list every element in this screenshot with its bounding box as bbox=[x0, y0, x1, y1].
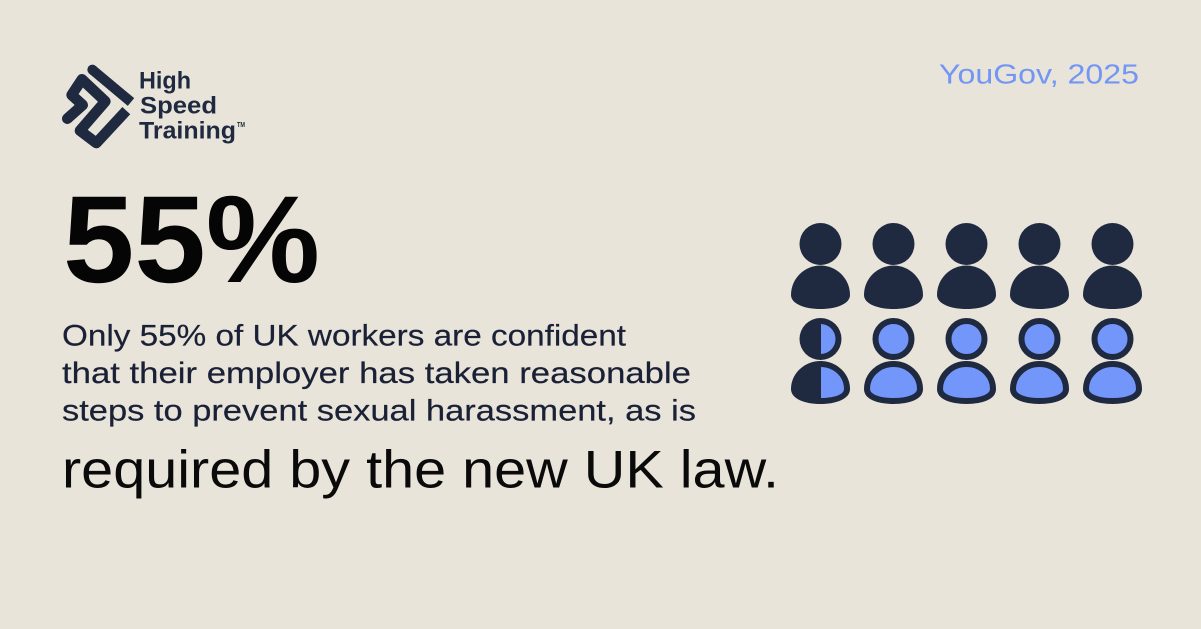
logo wordmark: TM bbox=[237, 122, 245, 129]
body text bbox=[62, 320, 696, 428]
logo: High Speed Training bbox=[62, 65, 245, 144]
logo wordmark: Speed bbox=[140, 92, 217, 120]
body text: steps to prevent sexual harassment, as is bbox=[62, 394, 696, 428]
source label: YouGov, 2025 bbox=[939, 58, 1139, 90]
bottom row: half-filled person bbox=[791, 318, 850, 404]
emphasised closing line: required by the new UK law. bbox=[62, 440, 779, 500]
headline stat: 55% bbox=[63, 171, 320, 309]
logo wordmark: Training bbox=[139, 118, 236, 144]
pictogram: 55 percent of people bbox=[791, 223, 1142, 404]
top row: filled people bbox=[791, 223, 1142, 309]
body text: that their employer has taken reasonable bbox=[62, 357, 691, 390]
bottom row: outlined people bbox=[867, 321, 1139, 401]
logo wordmark: High bbox=[139, 68, 191, 94]
icon: logo chevrons bbox=[62, 65, 131, 143]
logo wordmark bbox=[139, 68, 245, 144]
body text: Only 55% of UK workers are confident bbox=[62, 320, 627, 352]
